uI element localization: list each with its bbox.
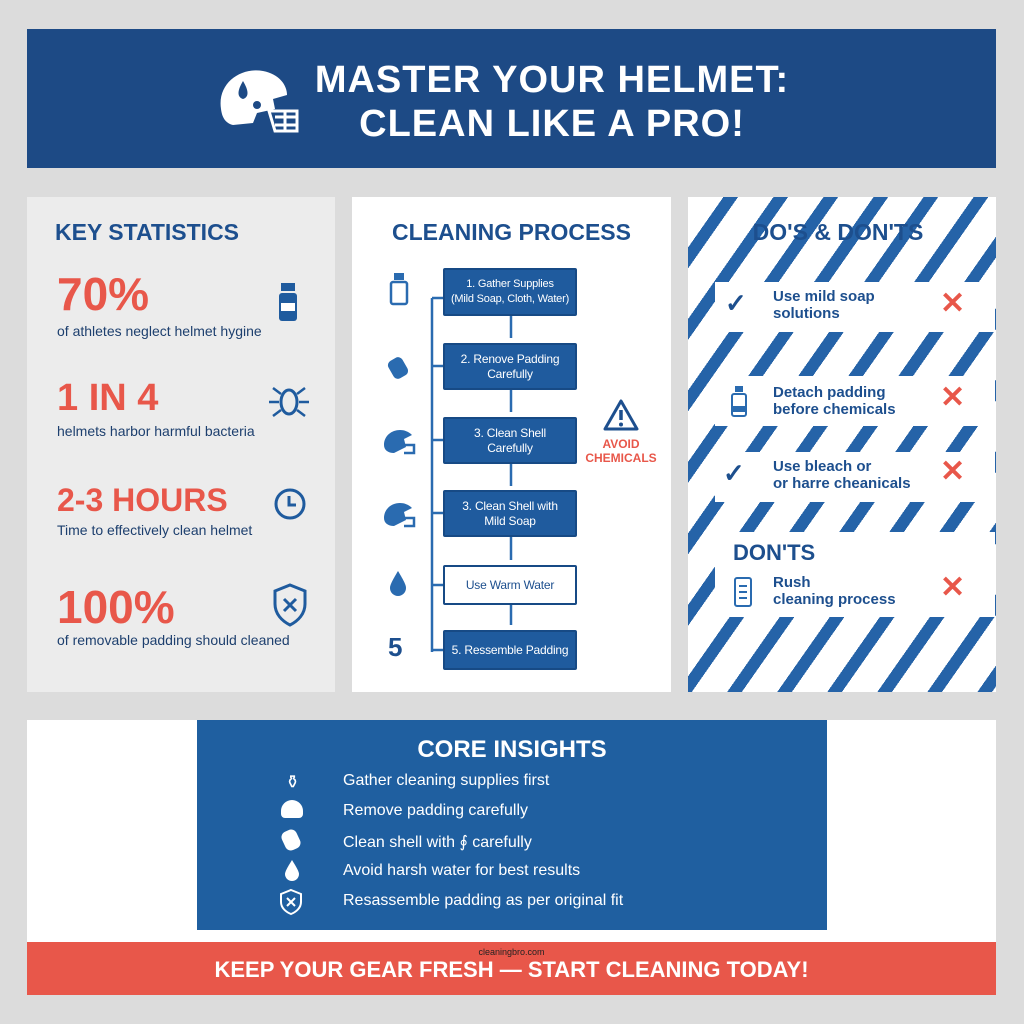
insight list: Remove padding carefully xyxy=(343,802,528,819)
do row 1: solutions xyxy=(773,305,840,322)
insight list xyxy=(280,772,624,916)
step 3: Carefully xyxy=(487,440,533,454)
do row 3: ✓ xyxy=(723,458,745,488)
panel: dos and donts xyxy=(688,197,996,692)
heading: CORE INSIGHTS xyxy=(417,736,607,763)
icon: drop xyxy=(390,571,406,596)
donts block: DON'TS xyxy=(733,540,815,565)
stat hours: 2-3 HOURS xyxy=(57,482,228,518)
panel: key statistics: Time to effectively clean helmet xyxy=(57,522,252,538)
step 1 xyxy=(443,268,577,316)
step 1: (Mild Soap, Cloth, Water) xyxy=(451,293,569,305)
callout: avoid chemicals xyxy=(585,399,657,465)
process icons xyxy=(384,273,416,662)
donts block: Rush xyxy=(773,574,810,591)
icon: spray xyxy=(279,283,297,321)
do row 1: ✕ xyxy=(940,287,965,320)
step warm water xyxy=(443,565,577,605)
icon: bacteria xyxy=(269,387,309,417)
callout: avoid chemicals: CHEMICALS xyxy=(585,451,657,465)
do row 3: ✕ xyxy=(940,455,965,488)
do row 1: ✓ xyxy=(725,288,747,318)
bottom white strip xyxy=(27,720,996,945)
do row 2: before chemicals xyxy=(773,401,896,418)
step boxes xyxy=(443,268,577,670)
panel: key statistics: helmets harbor harmful bacteria xyxy=(57,423,255,439)
icon: helmet xyxy=(384,430,416,454)
panel: cleaning process xyxy=(352,197,671,692)
insight list: ⚱ xyxy=(285,772,300,792)
header banner xyxy=(27,29,996,168)
panel: key statistics: of athletes neglect helmet hygine xyxy=(57,323,262,339)
do row 1: Use mild soap xyxy=(773,288,875,305)
icon: shield xyxy=(274,583,306,627)
step 3 xyxy=(443,417,577,464)
insight list: Resassemble padding as per original fit xyxy=(343,892,623,909)
flow connector xyxy=(430,296,512,652)
panel: core insights xyxy=(197,720,827,930)
icon: helmet xyxy=(384,503,416,528)
panel: key statistics xyxy=(27,197,335,692)
title: MASTER YOUR HELMET: xyxy=(315,59,789,101)
step 3: 3. Clean Shell xyxy=(474,426,546,440)
do row 1 xyxy=(715,282,995,332)
step 5 xyxy=(443,630,577,670)
title: CLEAN LIKE A PRO! xyxy=(359,103,745,145)
do row 2: ✕ xyxy=(940,381,965,414)
insight list: Gather cleaning supplies first xyxy=(343,772,549,789)
step 2 xyxy=(443,343,577,390)
number 5: 5 xyxy=(388,632,402,662)
title xyxy=(315,59,789,145)
footer banner xyxy=(27,942,996,995)
heading: KEY STATISTICS xyxy=(55,219,239,245)
step 1: 1. Gather Supplies xyxy=(466,278,554,290)
do row 3 xyxy=(715,452,995,502)
do row 2: Detach padding xyxy=(773,384,886,401)
step 2: Carefully xyxy=(487,366,533,380)
heading: CLEANING PROCESS xyxy=(392,219,631,245)
donts block: cleaning process xyxy=(773,591,896,608)
heading: DO'S & DON'TS xyxy=(753,219,923,245)
insight list: Avoid harsh water for best results xyxy=(343,862,580,879)
icon: spray xyxy=(390,273,408,306)
do row 3: Use bleach or xyxy=(773,458,871,475)
stat 70%: 70% xyxy=(57,268,149,320)
donts block xyxy=(715,532,995,617)
step 4: Mild Soap xyxy=(484,514,536,528)
step 4: 3. Clean Shell with xyxy=(462,498,558,512)
insight list: Clean shell with ∮ carefully xyxy=(343,834,532,851)
do row 2 xyxy=(715,376,995,426)
source text: cleaningbro.com xyxy=(478,947,545,957)
stat 100%: 100% xyxy=(57,581,175,633)
step 5: 5. Ressemble Padding xyxy=(452,642,568,656)
panel: key statistics: of removable padding should cleaned xyxy=(57,632,290,648)
do row 3: or harre cheanicals xyxy=(773,475,911,492)
callout: avoid chemicals: AVOID xyxy=(602,437,640,451)
icon: clock xyxy=(274,488,306,520)
step 4 xyxy=(443,490,577,537)
icon: padding xyxy=(388,357,408,379)
donts block: ✕ xyxy=(940,571,965,604)
call to action: KEEP YOUR GEAR FRESH — START CLEANING TODAY! xyxy=(214,957,809,982)
icon: helmet xyxy=(220,70,298,132)
stat 1 in 4: 1 IN 4 xyxy=(57,377,158,419)
step 2: 2. Renove Padding xyxy=(461,352,559,366)
step warm water: Use Warm Water xyxy=(466,578,554,592)
